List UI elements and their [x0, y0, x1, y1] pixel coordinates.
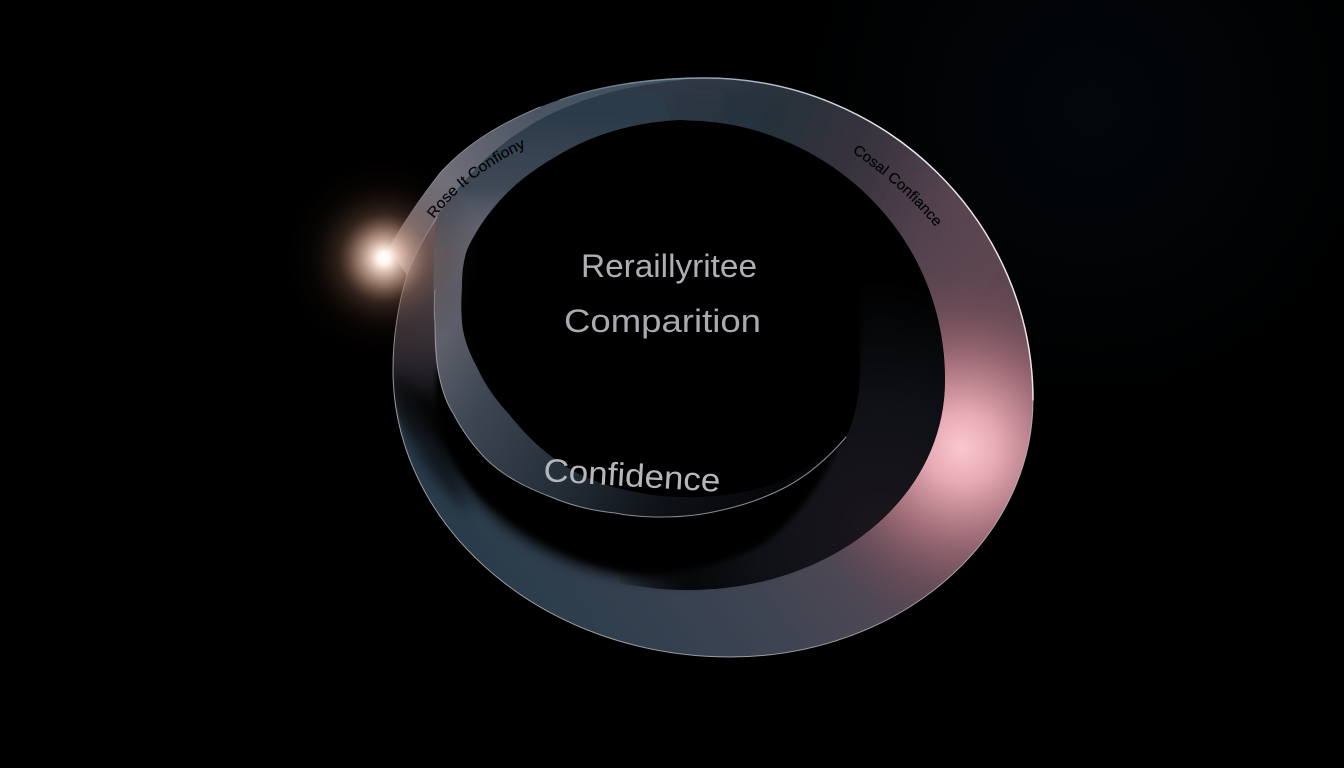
rim highlights [388, 78, 1033, 657]
black gap between rings [436, 250, 861, 573]
center label 1: Reraillyritee [581, 248, 757, 284]
black inner hole [461, 120, 860, 497]
center label 2: Comparition [564, 303, 761, 339]
center label 3: Confidence [543, 452, 721, 499]
curved label: right: Cosal Confiance [854, 146, 940, 226]
infographic canvas [312, 30, 1171, 658]
inner ring [434, 93, 798, 516]
light flare [284, 158, 484, 358]
mauve strip on left [393, 218, 438, 432]
curved label: left: Rose It Confiony [426, 140, 524, 218]
ring diagram [390, 77, 1034, 658]
outer ring [394, 78, 1033, 657]
upper left lighter flap [388, 78, 705, 275]
dark band inside outer ring [410, 120, 945, 590]
